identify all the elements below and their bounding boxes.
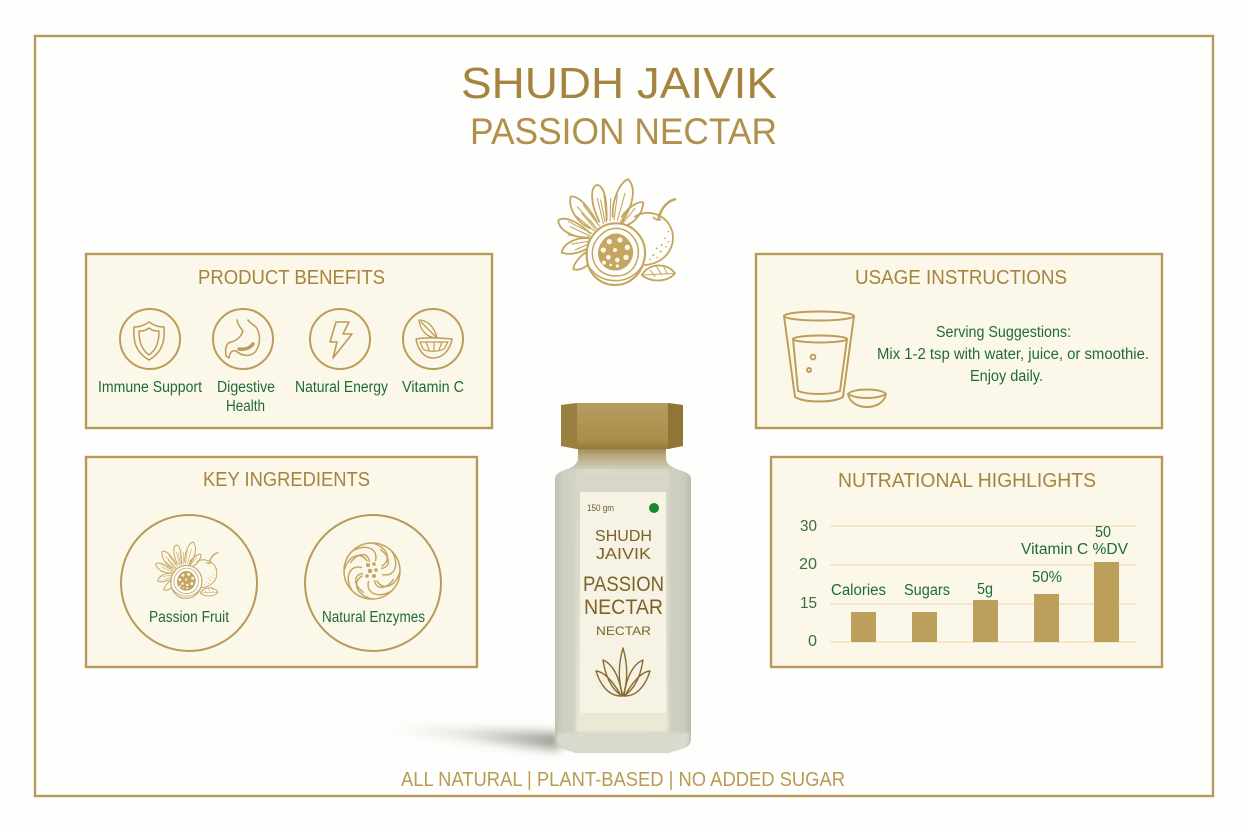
- text: serving suggestions: Enjoy daily.: [970, 368, 1043, 385]
- panel: usage instructions: [756, 254, 1162, 428]
- y axis labels: 20: [799, 556, 817, 573]
- panel: nutritional highlights: [771, 457, 1162, 667]
- icon: vitamin c citrus: [403, 309, 463, 369]
- title: PASSION NECTAR: [470, 111, 777, 152]
- ingredient: natural enzymes: [305, 515, 441, 651]
- title: SHUDH JAIVIK: [461, 59, 777, 108]
- bar labels: Sugars: [904, 582, 950, 599]
- labels: digestive health: Health: [226, 398, 265, 415]
- bar labels: 5g: [977, 581, 993, 598]
- bars: [851, 562, 1119, 642]
- labels: digestive health: [217, 379, 275, 415]
- product bottle: [555, 403, 691, 753]
- y axis labels: 0: [808, 633, 817, 650]
- y axis labels: 30: [800, 518, 817, 535]
- text: serving suggestions: Serving Suggestions:: [936, 324, 1071, 341]
- bottle label: 150 gm: [587, 503, 614, 513]
- bottle cap: [561, 403, 683, 449]
- bottle label: JAIVIK: [596, 546, 651, 563]
- ingredient: passion fruit: [121, 515, 257, 651]
- heading: product benefits: PRODUCT BENEFITS: [198, 267, 385, 289]
- bottle label: PASSION: [583, 573, 664, 596]
- panel: key ingredients: [86, 457, 477, 667]
- icon: immune support shield: [120, 309, 180, 369]
- heading: key ingredients: KEY INGREDIENTS: [203, 469, 370, 491]
- icon: natural energy bolt: [310, 309, 370, 369]
- bar labels: Vitamin C %DV: [1021, 541, 1129, 558]
- bottle label: SHUDH: [595, 528, 652, 545]
- text: serving suggestions: Mix 1-2 tsp with water, juice, or smoothie.: [877, 346, 1149, 363]
- icon: digestive stomach: [213, 309, 273, 369]
- bottle label: NECTAR: [584, 596, 663, 619]
- bar chart: [799, 518, 1137, 650]
- bottle shadow: [375, 727, 560, 750]
- panel: product benefits: [86, 254, 492, 428]
- heading: usage instructions: USAGE INSTRUCTIONS: [855, 267, 1067, 289]
- label: immune support: Immune Support: [98, 379, 203, 396]
- ingredient: natural enzymes: Natural Enzymes: [322, 609, 425, 626]
- bar labels: Calories: [831, 582, 886, 599]
- bar labels: [831, 524, 1129, 599]
- y axis labels: [799, 518, 817, 650]
- label: vitamin c: Vitamin C: [402, 379, 464, 396]
- y axis labels: 15: [800, 595, 817, 612]
- bottle label: NECTAR: [596, 624, 651, 638]
- bar labels: 50: [1095, 524, 1111, 541]
- icon: glass of water with bowl: [784, 312, 886, 407]
- bar labels: 50%: [1032, 569, 1062, 586]
- icon: passion fruit emblem: [558, 179, 675, 285]
- bottle body: [555, 469, 691, 753]
- footer tagline: ALL NATURAL | PLANT-BASED | NO ADDED SUGAR: [401, 769, 845, 791]
- text: serving suggestions: [877, 324, 1149, 385]
- labels: digestive health: Digestive: [217, 379, 275, 396]
- label: natural energy: Natural Energy: [295, 379, 388, 396]
- bottle label: [580, 492, 666, 713]
- heading: nutritional highlights: NUTRATIONAL HIGHLIGHTS: [838, 470, 1096, 492]
- bottle neck: [564, 445, 680, 470]
- icon: aloe plant: [596, 648, 650, 696]
- ingredient: passion fruit: Passion Fruit: [149, 609, 230, 626]
- title: [461, 59, 777, 152]
